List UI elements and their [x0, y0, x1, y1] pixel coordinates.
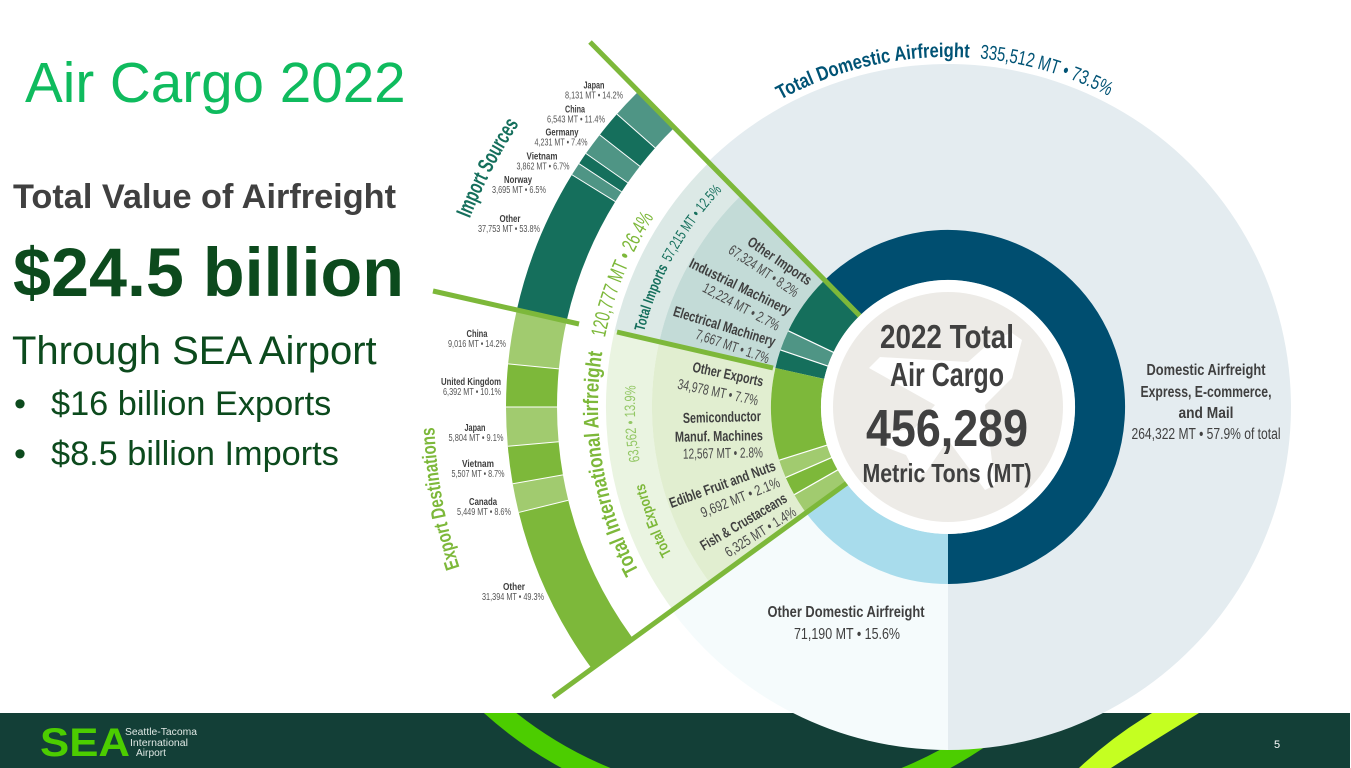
title: Air Cargo 2022: [25, 51, 406, 114]
import category labels: Industrial Machinery: [686, 256, 793, 319]
outer ring: export destinations: [506, 315, 612, 653]
arc label: imports value: 57,215 MT • 12.5%: [662, 184, 722, 262]
arc label: international value: 120,777 MT • 26.4%: [592, 212, 653, 337]
import category labels: 67,324 MT • 8.2%: [725, 242, 801, 301]
bullet list: [14, 385, 339, 473]
domestic airfreight label: and Mail: [1178, 405, 1234, 422]
export destination labels: 9,016 MT • 14.2%: [448, 339, 506, 350]
radial chart: [422, 40, 1291, 750]
bullet list: $8.5 billion Imports: [51, 435, 339, 473]
other domestic airfreight label: Other Domestic Airfreight: [768, 604, 924, 621]
export destination labels: United Kingdom: [441, 377, 501, 388]
other domestic sector background: [671, 407, 948, 750]
import category labels: 12,224 MT • 2.7%: [700, 280, 782, 335]
import source labels: Vietnam: [526, 152, 558, 162]
domestic airfreight label: 264,322 MT • 57.9% of total: [1132, 426, 1280, 443]
inner ring: imports: [780, 299, 841, 373]
footer logo: International: [130, 738, 188, 749]
export category labels: Semiconductor: [683, 409, 761, 427]
icon: airplane: [869, 333, 1022, 490]
import source labels: 3,862 MT • 6.7%: [516, 162, 570, 172]
export destination labels: 5,507 MT • 8.7%: [452, 469, 505, 480]
arc label: exports value: 63,562 • 13.9%: [624, 386, 640, 462]
arc label: domestic value: 335,512 MT • 73.5%: [980, 44, 1112, 95]
left text block: total value: [12, 178, 404, 473]
import source labels: Norway: [504, 175, 532, 186]
center text: [862, 318, 1032, 488]
inner ring: domestic express: [841, 255, 1100, 559]
import source labels: 3,695 MT • 6.5%: [492, 185, 546, 196]
export destination labels: Other: [503, 582, 525, 593]
export destination labels: 5,449 MT • 8.6%: [457, 507, 511, 518]
import source labels: [478, 80, 623, 235]
other domestic airfreight label: 71,190 MT • 15.6%: [794, 626, 900, 643]
domestic sector background: [707, 64, 1291, 750]
export category labels: [667, 360, 800, 561]
export category labels: 6,325 MT • 1.4%: [722, 504, 800, 561]
domestic airfreight label: Domestic Airfreight: [1146, 362, 1266, 379]
center text: Metric Tons (MT): [862, 458, 1032, 488]
domestic airfreight label: [1132, 362, 1280, 443]
footer logo: SEA: [40, 721, 130, 765]
import source labels: China: [565, 104, 585, 116]
big value: $24.5 billion: [13, 235, 404, 311]
export destination labels: 31,394 MT • 49.3%: [482, 592, 544, 603]
import category labels: Electrical Machinery: [671, 304, 777, 350]
arc label: total imports: Total Imports: [634, 264, 668, 330]
inner ring: exports: [779, 373, 839, 497]
import source labels: 6,543 MT • 11.4%: [547, 114, 605, 126]
import source labels: Germany: [546, 128, 579, 138]
domestic airfreight label: Express, E-commerce,: [1140, 384, 1272, 401]
export destination labels: Vietnam: [462, 459, 494, 470]
center circle: [821, 280, 1075, 534]
import category labels: [671, 234, 814, 367]
export category labels: Other Exports: [691, 360, 765, 390]
export destination labels: Japan: [464, 423, 486, 434]
arc label: total exports: Total Exports: [637, 484, 670, 558]
footer logo: [40, 721, 197, 765]
inner ring: other domestic: [825, 497, 948, 559]
export category labels: 12,567 MT • 2.8%: [683, 445, 763, 463]
export category labels: Edible Fruit and Nuts: [667, 459, 778, 512]
export category labels: 9,692 MT • 2.1%: [699, 475, 783, 521]
page number: 5: [1274, 739, 1280, 751]
export category labels: Fish & Crustaceans: [698, 491, 790, 554]
bullet list: •: [14, 435, 26, 473]
value heading: Total Value of Airfreight: [13, 178, 396, 216]
import source labels: 4,231 MT • 7.4%: [534, 138, 588, 148]
arc label: total domestic airfreight: Total Domestic Airfreight: [774, 42, 970, 98]
arc label: export destinations: Export Destinations: [422, 428, 460, 571]
wedge divider lines: [433, 42, 860, 697]
export destination labels: [441, 329, 544, 603]
subheading: Through SEA Airport: [12, 329, 377, 373]
import source labels: 37,753 MT • 53.8%: [478, 224, 540, 235]
imports sector background: [637, 180, 782, 355]
center text: 2022 Total: [880, 318, 1014, 355]
import source labels: Japan: [584, 80, 604, 92]
outer ring: import sources: [542, 109, 657, 315]
export destination labels: 5,804 MT • 9.1%: [448, 433, 504, 444]
arc label: total international airfreight: Total International Airfreight: [582, 350, 638, 578]
import source labels: Other: [500, 214, 521, 225]
footer band: [0, 713, 1350, 768]
other domestic airfreight label: [768, 604, 924, 643]
bullet list: •: [14, 385, 26, 423]
bullet list: $16 billion Exports: [51, 385, 331, 423]
import source labels: 8,131 MT • 14.2%: [565, 90, 623, 102]
center text: Air Cargo: [890, 356, 1004, 393]
import category labels: 7,667 MT • 1.7%: [693, 327, 771, 367]
footer logo: Seattle-Tacoma: [125, 727, 197, 738]
exports sector background: [629, 336, 757, 595]
export category labels: 34,978 MT • 7.7%: [676, 377, 760, 409]
center text: 456,289: [866, 400, 1028, 458]
import category labels: Other Imports: [744, 234, 814, 289]
export category labels: Manuf. Machines: [675, 428, 763, 446]
export destination labels: Canada: [469, 497, 497, 508]
export destination labels: 6,392 MT • 10.1%: [443, 387, 501, 398]
export destination labels: China: [466, 329, 488, 340]
arc label: import sources: Import Sources: [456, 119, 518, 218]
footer logo: Airport: [136, 748, 166, 759]
